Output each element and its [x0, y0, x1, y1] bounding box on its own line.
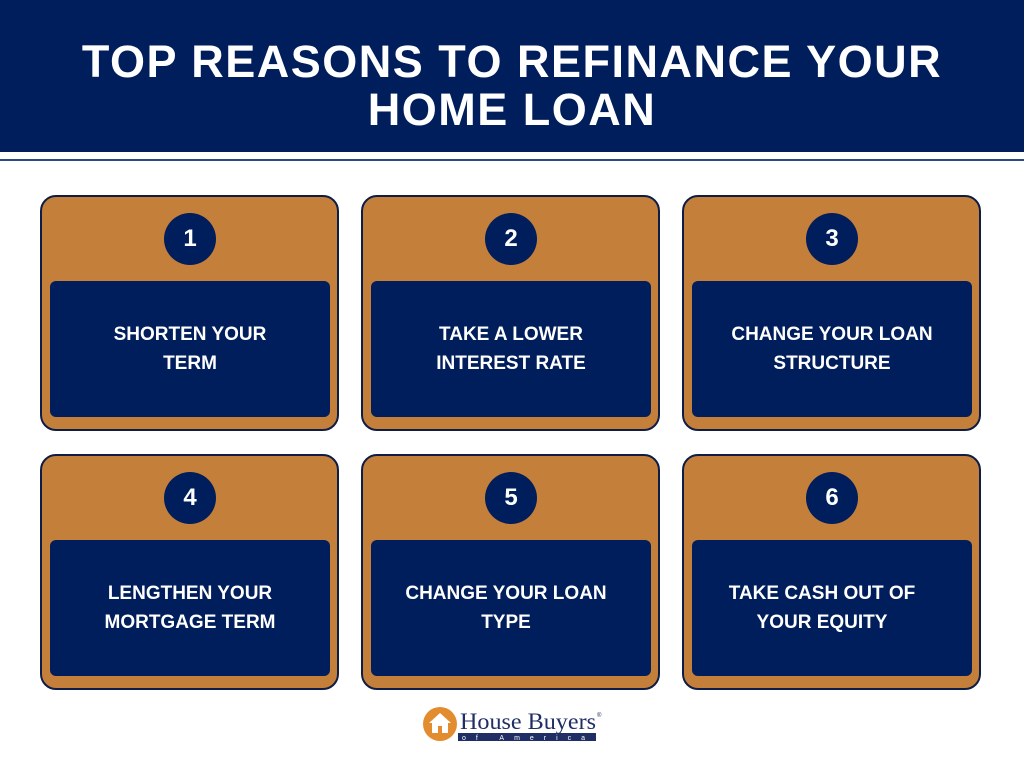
card 5: TYPE	[481, 612, 531, 633]
card 1: SHORTEN YOUR	[114, 324, 266, 345]
card 2	[361, 195, 660, 431]
card 2: INTEREST RATE	[436, 353, 586, 374]
card 4: 4	[183, 484, 197, 511]
card 3: CHANGE YOUR LOAN	[731, 324, 933, 345]
title	[82, 36, 942, 135]
logo: House Buyers	[460, 709, 596, 734]
card 4	[40, 454, 339, 690]
card 6: TAKE CASH OUT OF	[729, 583, 915, 604]
card 3	[682, 195, 981, 431]
card 4: MORTGAGE TERM	[104, 612, 276, 633]
card 1: TERM	[163, 353, 217, 374]
card 3: 3	[825, 225, 839, 252]
logo: ®	[597, 712, 602, 719]
card 2: 2	[504, 225, 518, 252]
title: TOP REASONS TO REFINANCE YOUR	[82, 36, 942, 87]
card 2: TAKE A LOWER	[439, 324, 583, 345]
card 5: 5	[504, 484, 518, 511]
card 4: LENGTHEN YOUR	[108, 583, 272, 604]
card 6	[682, 454, 981, 690]
card 5	[361, 454, 660, 690]
header banner	[0, 0, 1024, 152]
title: HOME LOAN	[368, 84, 656, 135]
card 1	[40, 195, 339, 431]
logo: of America	[462, 735, 595, 742]
logo	[423, 707, 602, 742]
card 6: YOUR EQUITY	[757, 612, 887, 633]
card 5: CHANGE YOUR LOAN	[405, 583, 607, 604]
card 3: STRUCTURE	[773, 353, 891, 374]
card 1: 1	[183, 225, 197, 252]
card 6: 6	[825, 484, 839, 511]
